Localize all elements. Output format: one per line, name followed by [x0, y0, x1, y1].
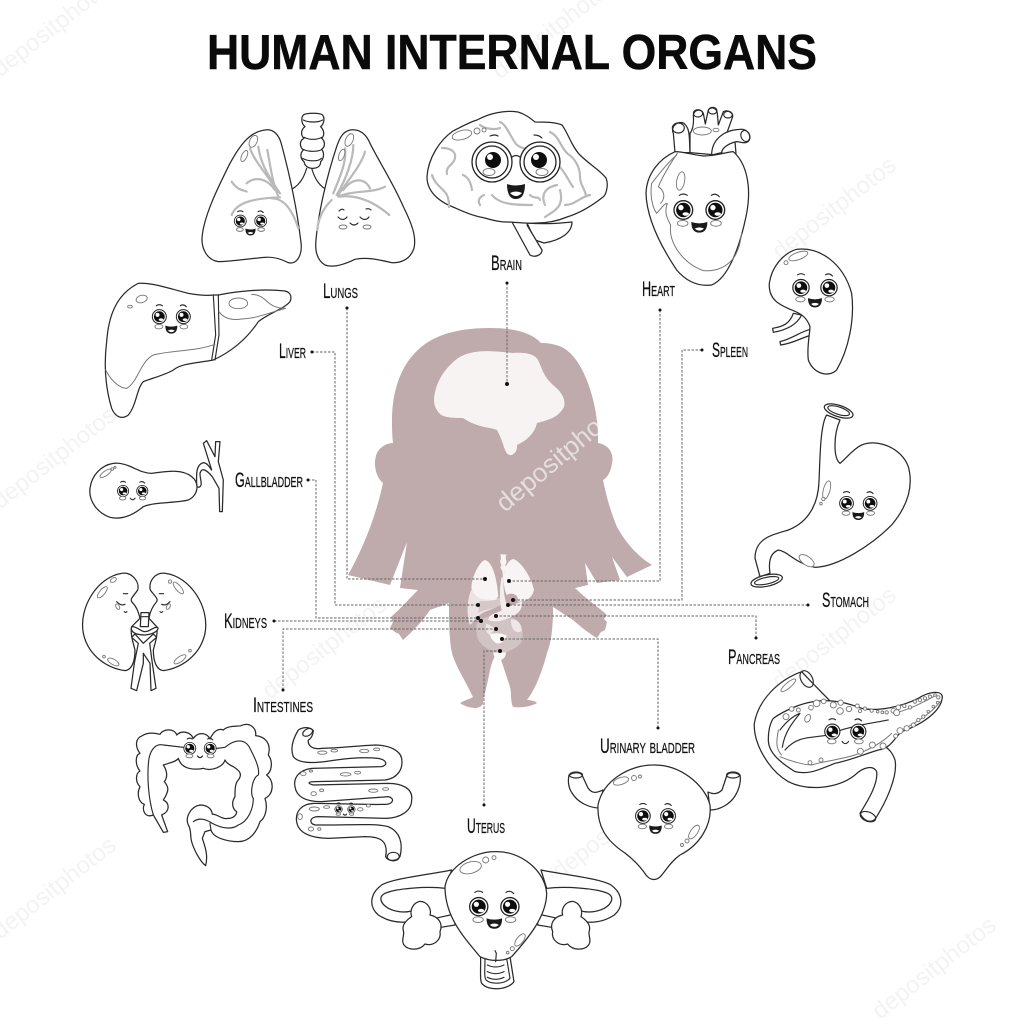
organ: small intestine	[292, 727, 412, 861]
label: liver: Liver	[279, 340, 306, 363]
watermark: depositphotos	[867, 911, 1001, 1024]
label: lungs: Lungs	[323, 280, 358, 303]
torso lungs	[471, 559, 534, 602]
watermark on body: depositphotos	[490, 389, 635, 518]
label: urinary bladder: Urinary bladder	[600, 735, 695, 758]
label: spleen: Spleen	[712, 339, 748, 362]
label: uterus: Uterus	[467, 815, 505, 838]
torso stomach	[488, 577, 522, 621]
organ: pancreas	[754, 668, 942, 824]
organ: gallbladder	[90, 441, 223, 518]
watermark: depositphotos	[767, 151, 901, 265]
organ: urinary bladder	[568, 765, 740, 879]
face right lung	[338, 209, 371, 229]
torso trachea	[500, 554, 507, 578]
trachea	[300, 113, 324, 168]
heart vessels	[672, 107, 751, 155]
organ: stomach	[750, 401, 910, 590]
organ: brain	[427, 111, 607, 256]
title: HUMAN INTERNAL ORGANS	[207, 26, 817, 80]
organ: kidneys	[83, 573, 206, 691]
face left lung	[234, 211, 267, 235]
watermark: depositphotos	[767, 581, 901, 695]
organ: heart	[646, 107, 751, 285]
label: intestines: Intestines	[253, 694, 313, 717]
label: kidneys: Kidneys	[224, 610, 267, 633]
organs in torso	[468, 554, 534, 660]
label: pancreas: Pancreas	[728, 646, 780, 669]
organ: spleen	[769, 249, 853, 374]
torso intestines	[476, 615, 523, 652]
torso small intestine	[486, 620, 522, 635]
glasses	[472, 135, 560, 182]
body silhouette	[348, 328, 652, 708]
label: gallbladder: Gallbladder	[235, 469, 303, 492]
label: stomach: Stomach	[822, 589, 869, 612]
brain in head	[434, 351, 565, 455]
organ: uterus	[372, 852, 621, 989]
organ: liver	[105, 283, 291, 417]
label: heart: Heart	[642, 278, 675, 301]
organ: large intestine	[136, 724, 272, 866]
leader lines	[272, 282, 810, 806]
watermark: depositphotos	[257, 591, 391, 705]
label: brain: Brain	[491, 252, 522, 275]
torso liver	[468, 590, 503, 625]
watermark: depositphotos	[547, 771, 681, 885]
torso bladder	[490, 633, 507, 660]
organ: lungs	[202, 113, 415, 266]
